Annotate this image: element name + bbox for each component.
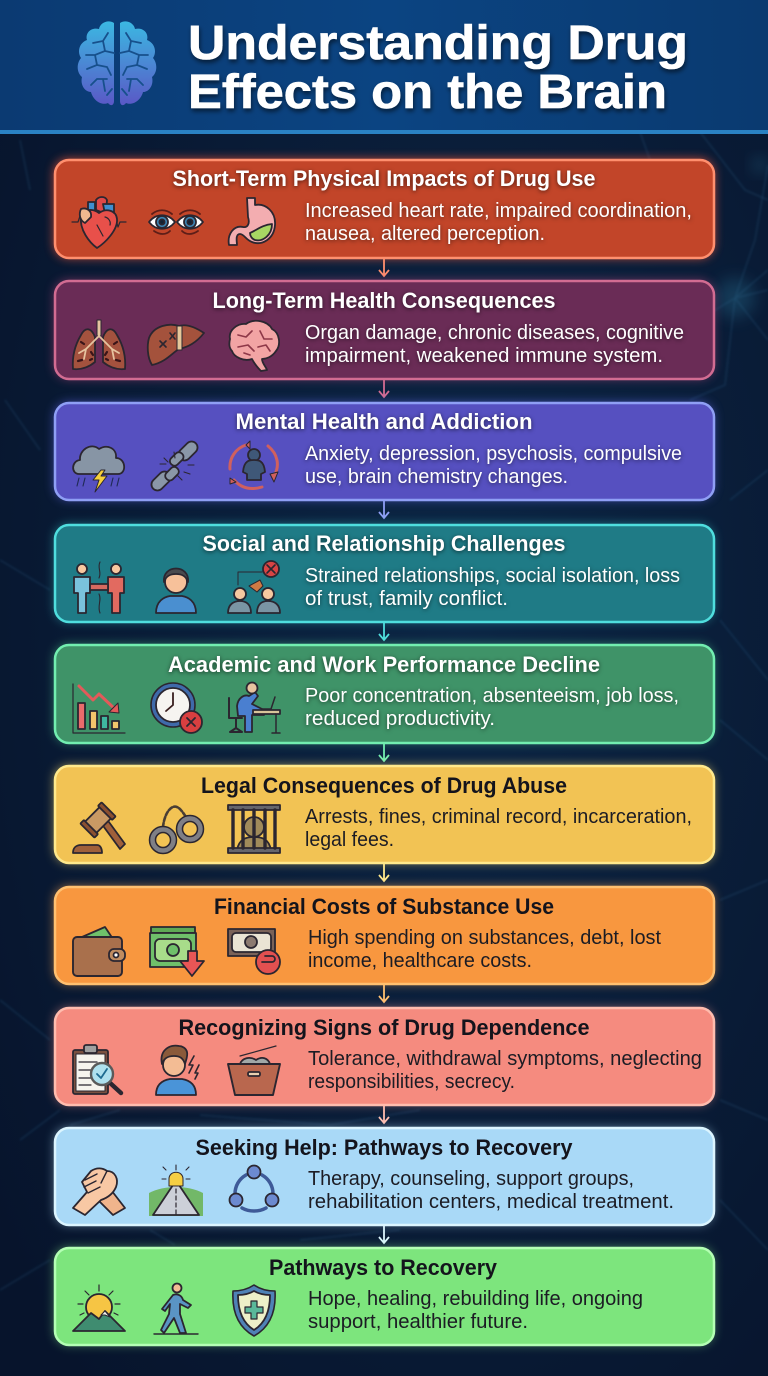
text: support, healthier future. [308,1311,528,1333]
icon: brain side [229,321,279,371]
icon: storm cloud [73,446,124,492]
panel: academic and work [54,644,714,743]
text: nausea, altered perception. [305,223,545,245]
arrow [379,623,389,640]
icon: group conflict [228,561,280,613]
panel: financial costs [54,886,714,984]
text: Organ damage, chronic diseases, cognitive [305,322,684,344]
text: High spending on substances, debt, lost [308,927,661,949]
title: Understanding Drug [188,17,688,70]
icon: liver [148,325,204,365]
header banner [0,0,768,134]
text: income, healthcare costs. [308,950,532,972]
heading: Financial Costs of Substance Use [214,894,554,919]
icon: lungs [73,320,125,369]
text [305,806,692,851]
text: Arrests, fines, criminal record, incarceration, [305,806,692,828]
icon: brain [78,21,156,105]
text: rehabilitation centers, medical treatment. [308,1191,674,1213]
text: impairment, weakened immune system. [305,345,663,367]
heading: Academic and Work Performance Decline [168,652,600,677]
text [305,322,684,367]
panel: signs of dependence [54,1007,714,1105]
text: Anxiety, depression, psychosis, compulsive [305,443,682,465]
icon: cycle figure [230,441,278,489]
text [305,685,679,730]
heading: Legal Consequences of Drug Abuse [201,773,567,798]
heading: Recognizing Signs of Drug Dependence [178,1015,590,1040]
text [308,1288,643,1333]
icon: gavel [73,802,125,853]
panel: mental health and addiction [54,402,714,500]
heading: Social and Relationship Challenges [202,531,566,556]
text: Tolerance, withdrawal symptoms, neglecting [308,1048,702,1070]
text: responsibilities, secrecy. [308,1071,515,1093]
panel: social and relationship [54,524,714,622]
icon: person [156,568,196,613]
icon: stressed man [156,1046,199,1095]
text: Poor concentration, absenteeism, job loss, [305,685,679,707]
heading: Mental Health and Addiction [236,409,532,434]
title: Effects on the Brain [188,66,667,119]
arrow [379,380,389,397]
panel: short-term physical impacts [54,159,714,258]
text: use, brain chemistry changes. [305,466,568,488]
panel: pathways to recovery [54,1247,714,1345]
arrow [379,259,389,276]
heading: Seeking Help: Pathways to Recovery [196,1135,573,1160]
text [308,1168,674,1213]
text: of trust, family conflict. [305,588,508,610]
arrow [379,864,389,881]
icon: jail bars [228,805,280,853]
text [308,927,661,972]
text [305,565,680,610]
heading: Pathways to Recovery [269,1255,498,1280]
panel: seeking help [54,1127,714,1225]
icon: health shield [233,1285,275,1336]
icon: wallet [73,927,125,976]
icon: clock with x [151,683,202,733]
icon: road with light [149,1165,203,1216]
text: Strained relationships, social isolation, loss [305,565,680,587]
icon: clasped hands [73,1168,125,1215]
text: reduced productivity. [305,708,495,730]
text [308,1048,702,1093]
panel: long-term health [54,280,714,379]
arrow [379,501,389,518]
text: Therapy, counseling, support groups, [308,1168,634,1190]
arrow [379,985,389,1002]
arrow [379,1226,389,1243]
icon: support circle [230,1166,278,1211]
arrow [379,1106,389,1123]
heading: Long-Term Health Consequences [212,288,556,313]
panel: legal consequences [54,765,714,863]
icon: eyes [149,210,203,234]
text: legal fees. [305,829,394,851]
text: Increased heart rate, impaired coordination, [305,200,692,222]
icon: bill with debt [228,929,280,974]
text [305,200,692,245]
text: Hope, healing, rebuilding life, ongoing [308,1288,643,1310]
icon: arguing people [74,562,124,613]
icon: stressed worker [229,682,280,733]
icon: stomach [229,198,275,245]
title [188,17,688,119]
icon: broken chain [149,439,200,493]
icon: sunrise mountain [73,1285,125,1331]
icon: handcuffs [152,807,200,850]
icon: walking person [154,1284,198,1334]
icon: heart [72,197,126,248]
arrow [379,744,389,761]
icon: hidden box [228,1046,280,1095]
heading: Short-Term Physical Impacts of Drug Use [172,166,596,191]
icon: falling chart [73,684,125,733]
icon: clipboard magnifier [73,1045,121,1094]
text [305,443,682,488]
icon: money falling [150,927,204,976]
